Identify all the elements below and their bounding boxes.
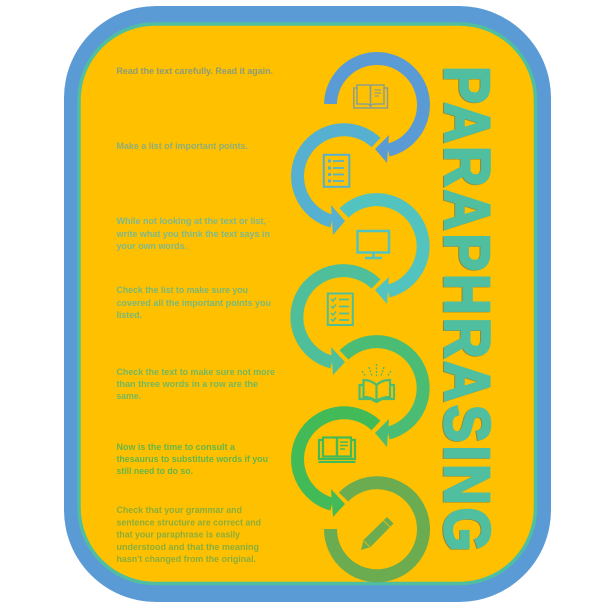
step 6 text: thesaurus to substitute words if you	[116, 454, 268, 464]
step 3 text: your own words.	[116, 241, 187, 251]
step 6 text: still need to do so.	[116, 466, 193, 476]
icon: pencil	[361, 517, 394, 550]
step 6 text	[116, 442, 268, 476]
arrow 2	[298, 130, 376, 235]
title: PARAPHRASING	[430, 66, 502, 555]
step 3 text: write what you think the text says in	[116, 229, 270, 239]
arrow 4	[297, 271, 376, 375]
icon: monitor	[358, 231, 389, 258]
step 1 text: Read the text carefully. Read it again.	[116, 66, 273, 76]
panel: inner yellow background	[79, 24, 536, 584]
step 5 text	[116, 367, 275, 401]
step 3 text: While not looking at the text or list,	[116, 216, 266, 226]
step 2 text: Make a list of important points.	[116, 141, 248, 151]
step 7 text: hasn't changed from the original.	[116, 554, 256, 564]
icon: checklist	[328, 294, 353, 325]
step 7 text: understood and that the meaning	[116, 542, 259, 552]
step 5 text: than three words in a row are the	[116, 379, 258, 389]
step 5 text: same.	[116, 391, 141, 401]
icon: book with sparkles	[360, 364, 394, 402]
step 6 text: Now is the time to consult a	[116, 442, 236, 452]
icon: list	[324, 155, 349, 187]
step 7 text	[116, 505, 261, 564]
step 7 text: that your paraphrase is easily	[116, 530, 240, 540]
arrow 3	[344, 200, 423, 304]
step 4 text: Check the list to make sure you	[116, 285, 248, 295]
arrow 1	[330, 59, 423, 163]
step 4 text: listed.	[116, 310, 142, 320]
step 7 text: Check that your grammar and	[116, 505, 242, 515]
step 4 text	[116, 285, 271, 320]
icon: open book	[354, 85, 388, 108]
step 5 text: Check the text to make sure not more	[116, 367, 275, 377]
icon: open book with pages	[318, 438, 356, 462]
arrow 5	[344, 342, 423, 447]
step 4 text: covered all the important points you	[116, 298, 271, 308]
arrow 7: closing green ring	[330, 483, 423, 576]
arrow 6	[298, 413, 376, 517]
step 3 text	[116, 216, 270, 251]
panel: outer blue frame	[64, 6, 551, 602]
step 7 text: sentence structure are correct and	[116, 518, 261, 528]
title: PARAPHRASING	[431, 66, 503, 554]
